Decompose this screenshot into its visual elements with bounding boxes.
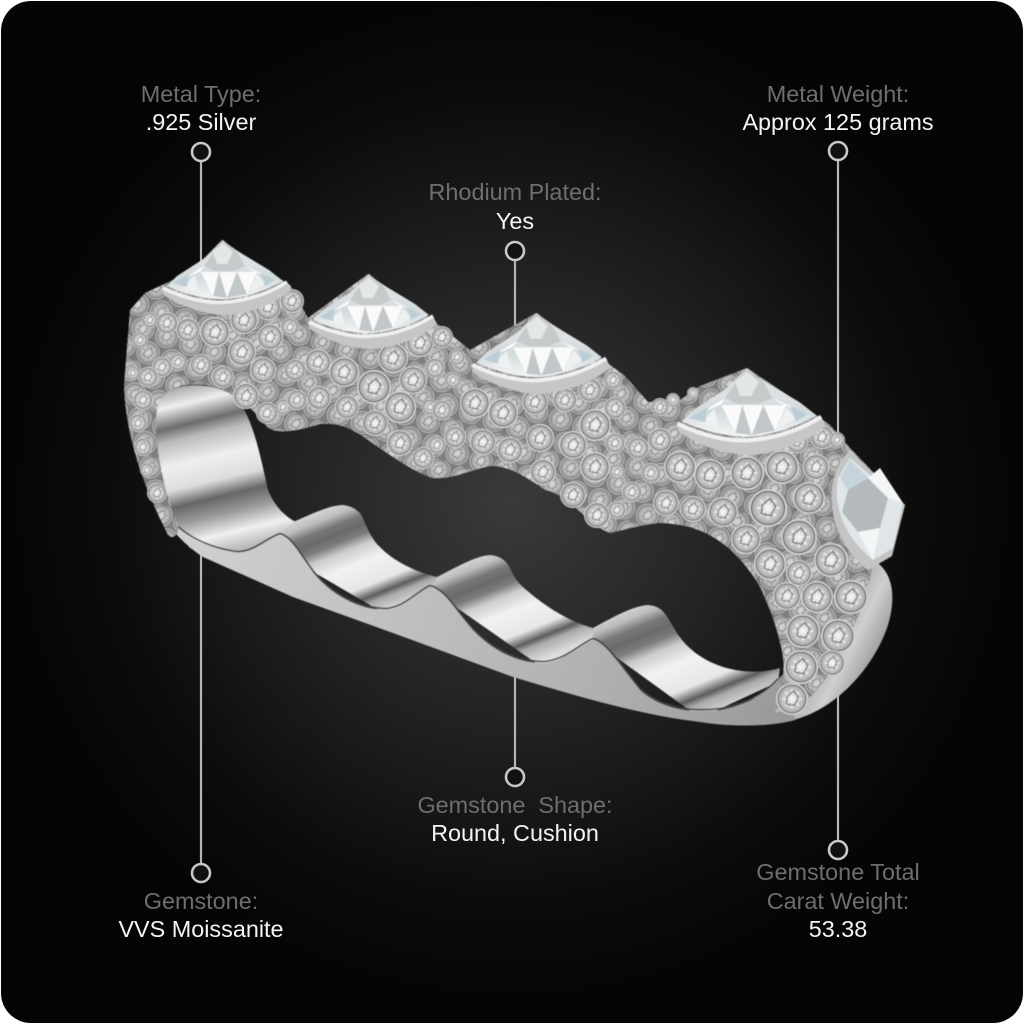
right shoulder metal <box>720 560 892 725</box>
pave stones <box>126 289 868 715</box>
gem 3 <box>472 313 610 394</box>
bottom bar front face <box>160 510 795 726</box>
scallop rim line <box>165 510 778 710</box>
label: gemstone total carat weight: Carat Weight: <box>767 888 909 914</box>
label: gemstone: Gemstone: <box>144 888 258 914</box>
gem 1 <box>163 240 291 315</box>
label: metal type <box>141 81 261 161</box>
label: gemstone total carat weight: 53.38 <box>809 916 867 942</box>
label: metal type: Metal Type: <box>141 81 261 107</box>
label: rhodium plated <box>429 179 601 260</box>
label: gemstone shape: Round, Cushion <box>431 820 599 846</box>
gem 2 <box>309 274 437 349</box>
gem 4 <box>677 368 826 455</box>
label: rhodium plated: Yes <box>496 208 534 234</box>
right side gem <box>832 450 905 570</box>
scallop wall 3 <box>593 605 780 718</box>
label: metal type: .925 Silver <box>146 109 256 135</box>
label: gemstone <box>118 864 284 942</box>
pave body <box>124 240 905 712</box>
label: metal weight: Approx 125 grams <box>742 109 934 135</box>
label: metal weight: Metal Weight: <box>767 81 909 107</box>
label: gemstone shape <box>417 768 613 846</box>
scallop wall 1 <box>278 505 437 615</box>
label: gemstone shape: Gemstone Shape: <box>417 792 613 818</box>
leader lines <box>201 160 838 864</box>
label: gemstone: VVS Moissanite <box>118 916 284 942</box>
label: metal weight <box>742 81 934 160</box>
scallop wall 2 <box>430 555 593 668</box>
label: gemstone total carat weight: Gemstone Total <box>756 859 920 885</box>
ring <box>124 240 905 726</box>
left inner band <box>156 385 296 562</box>
label: rhodium plated: Rhodium Plated: <box>429 179 601 205</box>
label: gemstone total carat weight <box>756 841 920 942</box>
